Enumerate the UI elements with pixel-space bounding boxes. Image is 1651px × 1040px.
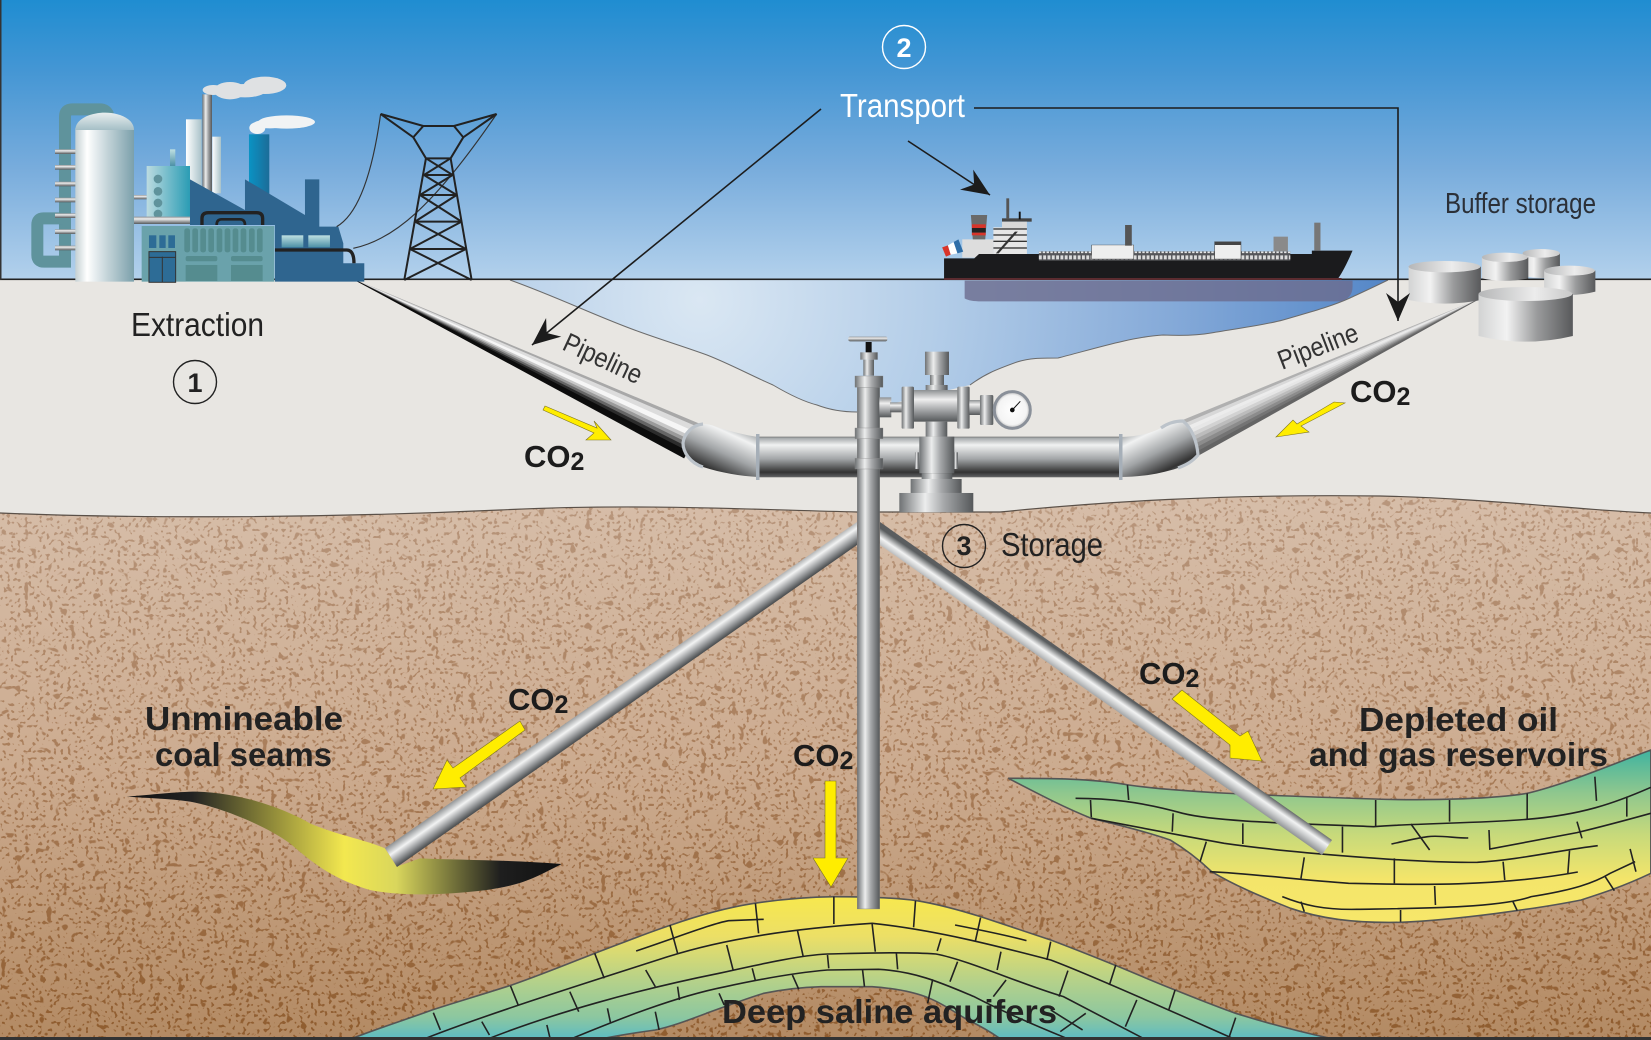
label: right pipeline: Pipeline <box>1273 317 1363 376</box>
heading: unmineable coal seams: coal seams <box>155 736 332 773</box>
label: CO2 coal: 2 <box>554 691 568 719</box>
power lines <box>337 114 497 248</box>
label: step 1: 1 <box>187 368 203 398</box>
roof pipes <box>202 213 354 263</box>
heading: depleted oil and gas reservoirs: and gas reservoirs <box>1309 736 1608 773</box>
heading: deep saline aquifers: Deep saline aquifers <box>722 993 1057 1030</box>
label: step 3: 3 <box>956 531 972 561</box>
shoreline <box>510 280 1388 412</box>
label: step 2: 2 <box>896 33 912 63</box>
stratum: deep saline aquifers <box>352 897 1330 1038</box>
superstructure <box>962 198 1032 258</box>
pressure gauge <box>994 392 1030 428</box>
label: extraction: Extraction <box>131 306 264 343</box>
soil boundary line <box>0 496 1651 517</box>
label: CO2 aquifer: CO <box>793 738 840 773</box>
bottom edge <box>0 1037 1651 1040</box>
sea water <box>490 279 1410 429</box>
hull <box>944 251 1353 278</box>
hand wheel <box>848 337 887 376</box>
heading: depleted oil and gas reservoirs: Depleted oil <box>1359 701 1558 738</box>
ship reflection <box>946 281 1353 301</box>
heading: unmineable coal seams <box>145 700 343 773</box>
left image border <box>0 0 2 280</box>
front building <box>142 226 274 282</box>
injection pipe to reservoirs <box>880 522 1332 855</box>
smoke clouds <box>203 77 315 134</box>
flag <box>942 239 963 257</box>
arrow: transport to buffer storage <box>974 108 1398 321</box>
heading: depleted oil and gas reservoirs <box>1309 701 1608 773</box>
condenser piping <box>37 109 108 262</box>
label: CO2 left pipeline: CO <box>524 439 570 474</box>
label: CO2 aquifer: 2 <box>840 747 853 775</box>
skylights <box>282 235 330 247</box>
deck equipment <box>1092 223 1320 259</box>
label: CO2 left pipeline: 2 <box>570 448 584 476</box>
sky background <box>0 0 1651 280</box>
pipe collars <box>855 376 883 469</box>
valve assembly <box>879 352 993 512</box>
chimneys <box>186 94 269 194</box>
label: transport: Transport <box>840 87 965 124</box>
pipe rungs <box>55 149 76 250</box>
right tapered pipeline <box>1181 300 1477 455</box>
label: left pipeline: Pipeline <box>558 327 647 390</box>
label: buffer storage: Buffer storage <box>1445 188 1596 220</box>
injection pipe to coal seam <box>385 522 857 867</box>
factory illustration <box>37 77 497 282</box>
label: CO2 right pipeline: 2 <box>1396 383 1410 411</box>
buffer storage tanks <box>1409 249 1595 342</box>
yellow arrow: right pipeline <box>1276 402 1345 437</box>
horizon line <box>0 278 1651 280</box>
saw-tooth building <box>190 179 364 282</box>
label: CO2 right pipeline: CO <box>1350 374 1396 409</box>
storage column <box>75 113 134 282</box>
yellow arrow: to coal seam <box>433 721 525 789</box>
label: step 2 <box>882 26 926 68</box>
yellow arrow: left pipeline <box>543 406 611 440</box>
ground surface <box>0 280 1651 530</box>
label: CO2 coal: CO <box>508 682 554 717</box>
stratum: coal seam <box>127 792 562 894</box>
horizontal pipeline with elbows <box>683 421 1198 480</box>
stratum: depleted oil and gas reservoirs <box>1008 750 1651 922</box>
deck rail <box>1039 251 1290 261</box>
waterline <box>944 278 1342 280</box>
label: CO2 reservoir: CO <box>1139 656 1186 691</box>
arrow: transport to ship <box>908 141 990 195</box>
label: step 1 <box>174 360 216 404</box>
left tapered pipeline <box>353 279 702 458</box>
teal tower <box>134 149 191 224</box>
yellow arrow: to aquifer <box>813 781 848 887</box>
yellow arrow: to reservoir <box>1172 690 1262 761</box>
label: step 3 <box>942 524 986 568</box>
soil layer <box>0 495 1651 1040</box>
arrow: transport to pipeline <box>532 109 821 345</box>
heading: unmineable coal seams: Unmineable <box>145 700 343 737</box>
label: CO2 reservoir: 2 <box>1186 665 1199 693</box>
wellhead and vertical injection pipe <box>848 337 1030 909</box>
pylon <box>381 114 497 280</box>
label: storage: Storage <box>1001 526 1103 563</box>
vertical pipe <box>857 387 880 909</box>
tanker ship <box>942 198 1353 301</box>
